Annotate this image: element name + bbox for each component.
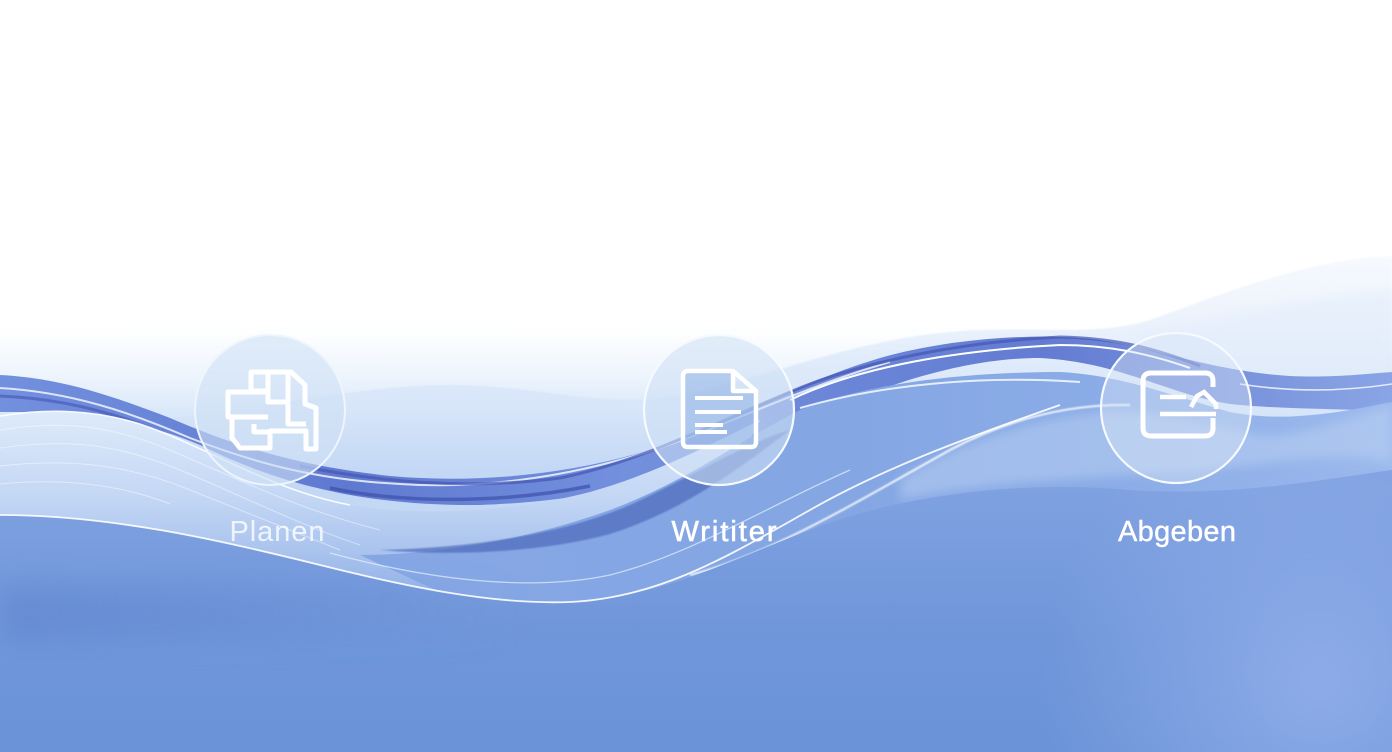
icon lines: document text [695, 398, 743, 432]
step: Writiter [644, 335, 794, 548]
circle: Writiter [644, 335, 794, 485]
pale distant waves [0, 256, 1392, 520]
label: Writiter: Writiter [672, 516, 777, 548]
light mesh wave on the left [0, 411, 760, 630]
icon: document [683, 371, 756, 447]
lower blue body [0, 405, 1392, 752]
icon lines: form fields [1160, 392, 1216, 414]
step: Abgeben [1101, 333, 1251, 548]
label: Abgeben: Abgeben [1118, 516, 1236, 548]
label: Planen: Planen [230, 516, 324, 548]
step: Planen [195, 335, 345, 548]
circle: Abgeben [1101, 333, 1251, 483]
right lighter wave crest [690, 405, 1392, 575]
icon: floor plan [228, 372, 316, 449]
dark ribbon wave [0, 337, 1392, 505]
soft haze above the waves [0, 325, 1392, 465]
central blue wave [360, 372, 1392, 620]
icon: submit form [1143, 373, 1213, 436]
circle: Planen [195, 335, 345, 485]
